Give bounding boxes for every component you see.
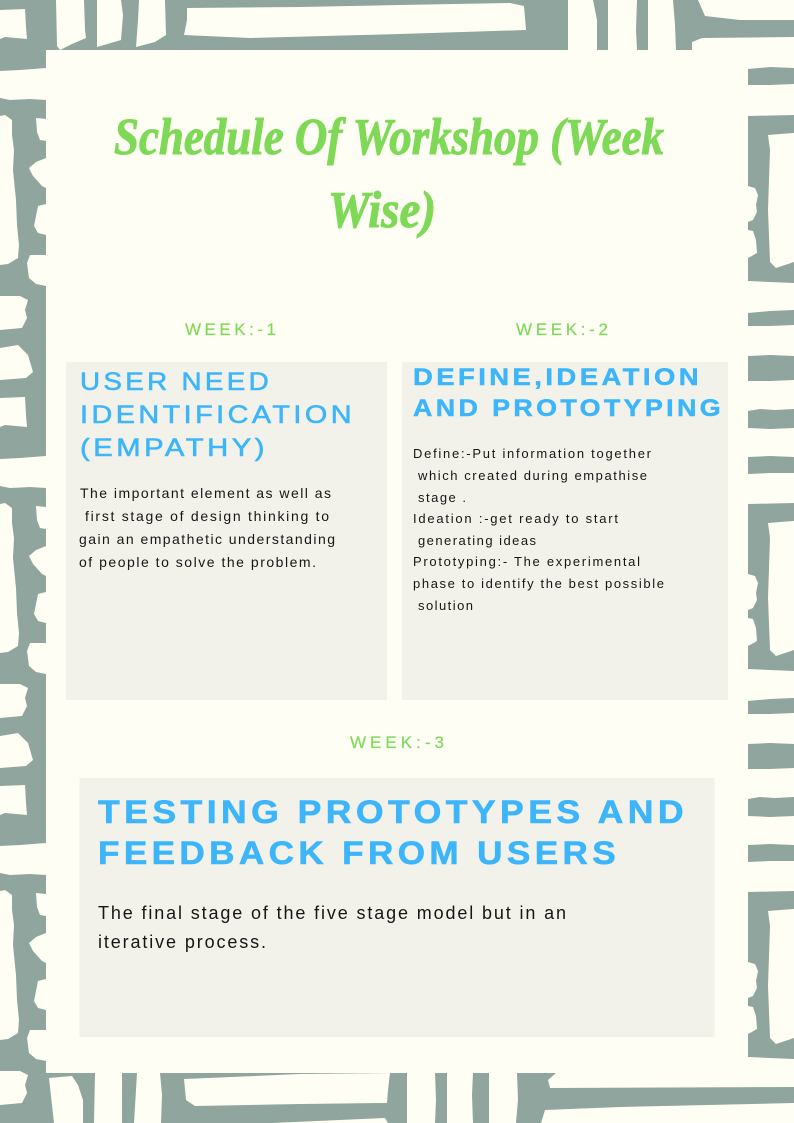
text block: stage definitions: phase to identify the best possible (413, 576, 664, 591)
heading: define, ideation and prototyping (413, 364, 724, 422)
text block: final stage description: The final stage of the five stage model but in an (98, 903, 566, 923)
text block: empathy description: gain an empathetic understanding (79, 531, 335, 547)
title: Wise) (328, 182, 436, 239)
heading: testing prototypes and feedback: FEEDBACK FROM USERS (98, 835, 620, 871)
heading: user need identification: IDENTIFICATION (80, 401, 355, 429)
text block: stage definitions (413, 446, 664, 613)
week 3 label: WEEK:-3 (350, 733, 444, 752)
title: Schedule Of Workshop (Week (114, 109, 664, 166)
heading: user need identification: (EMPATHY) (80, 434, 268, 462)
panel: week 1 user need identification (66, 362, 387, 700)
heading: define, ideation and prototyping: DEFINE,IDEATION (413, 364, 702, 391)
text block: stage definitions: solution (418, 598, 473, 613)
text block: stage definitions: Define:-Put information together (413, 446, 652, 461)
text block: empathy description: The important element as well as (80, 485, 331, 501)
panel: week 2 define, ideation and prototyping (402, 362, 728, 700)
title (114, 109, 664, 239)
text block: stage definitions: generating ideas (418, 533, 536, 548)
text block: stage definitions: which created during empathise (417, 468, 647, 483)
heading: user need identification: USER NEED (80, 368, 272, 396)
text block: empathy description (79, 485, 335, 570)
text block: stage definitions: stage . (418, 490, 466, 505)
heading: testing prototypes and feedback (98, 794, 688, 871)
heading: define, ideation and prototyping: AND PROTOTYPING (413, 395, 724, 422)
week 1 label: WEEK:-1 (185, 320, 276, 339)
text block: final stage description (98, 903, 566, 952)
panel: week 3 testing prototypes (80, 778, 714, 1037)
week 2 label: WEEK:-2 (516, 320, 608, 339)
text block: empathy description: first stage of design thinking to (85, 508, 329, 524)
heading: testing prototypes and feedback: TESTING PROTOTYPES AND (98, 794, 688, 830)
text block: empathy description: of people to solve the problem. (79, 554, 316, 570)
text block: stage definitions: Ideation :-get ready to start (413, 511, 618, 526)
text block: final stage description: iterative process. (98, 932, 266, 952)
text block: stage definitions: Prototyping:- The experimental (413, 554, 640, 569)
heading: user need identification (80, 368, 355, 462)
